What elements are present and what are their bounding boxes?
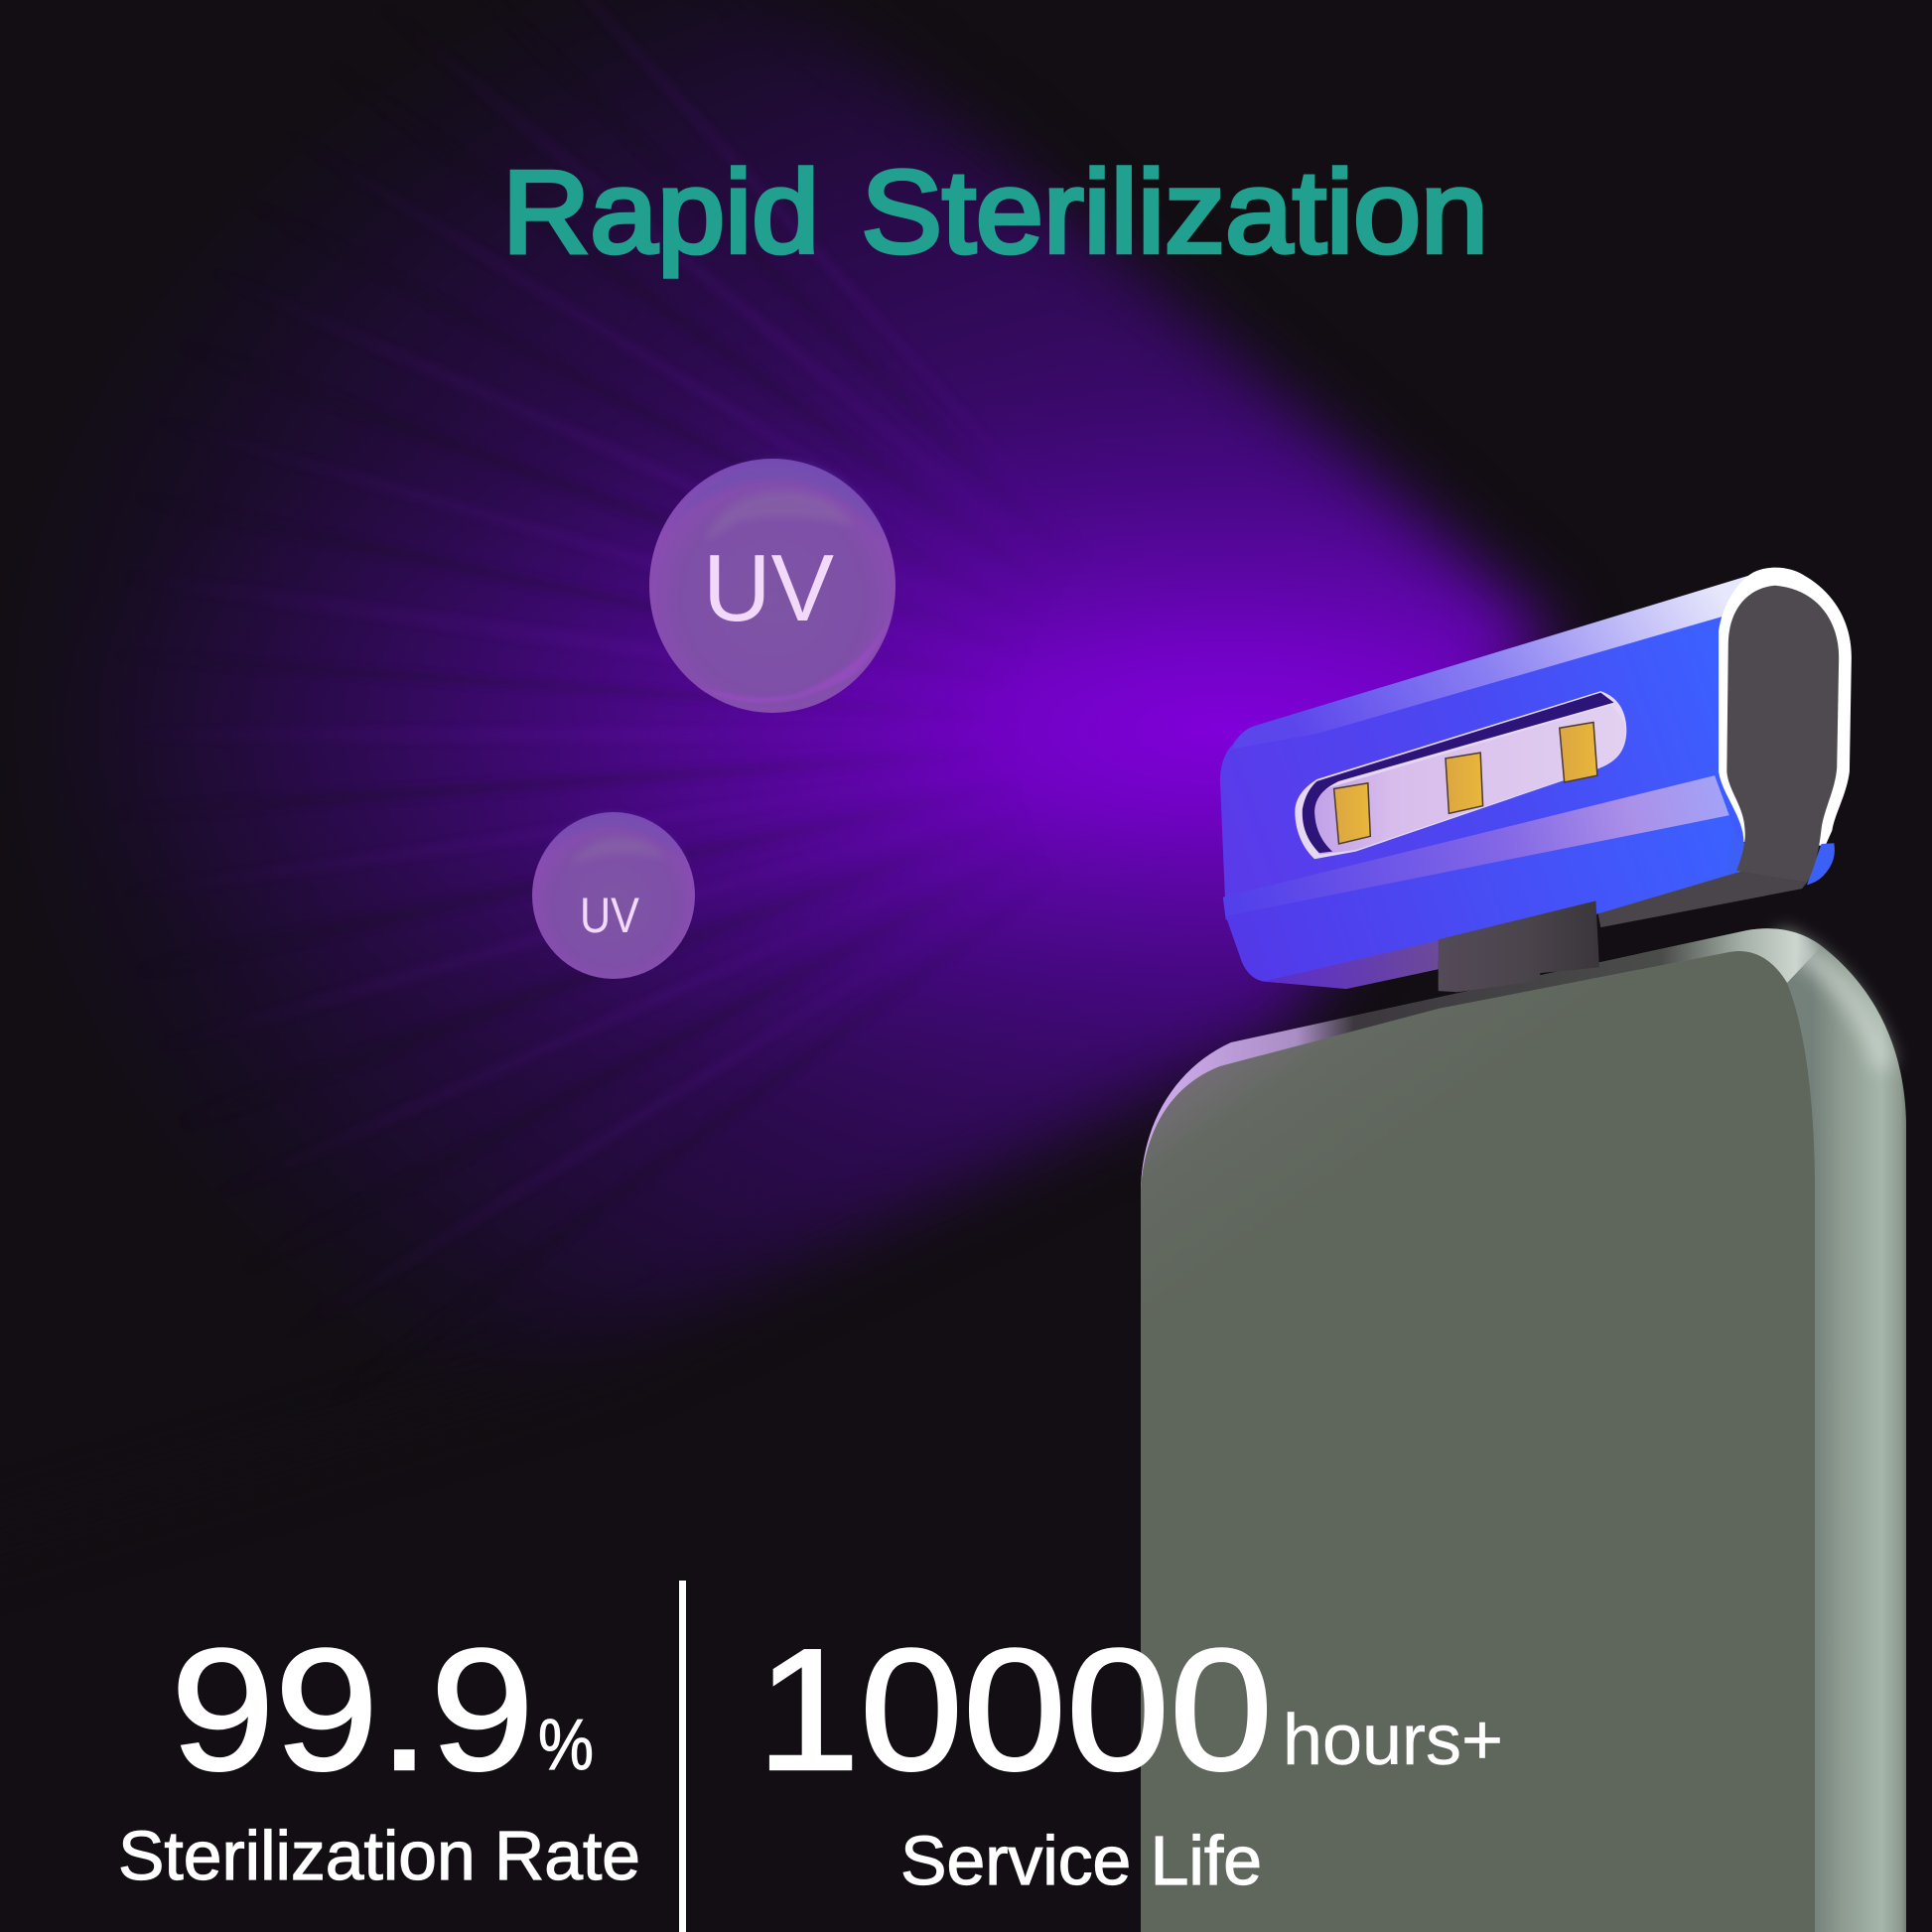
clip strap <box>1595 871 1807 927</box>
uv device <box>1220 568 1852 992</box>
phone screen <box>1141 951 1815 1932</box>
blue body <box>1220 578 1743 988</box>
phone <box>1141 928 1906 1932</box>
stat: sterilization rate <box>118 1612 640 1894</box>
lower highlight band <box>1223 775 1729 920</box>
bubble: large UV <box>649 459 896 713</box>
led chips <box>1334 783 1370 844</box>
bubble: large UV: UV <box>703 535 834 641</box>
end cap outline <box>1719 568 1852 846</box>
stat: sterilization rate: 99.9 <box>171 1612 534 1806</box>
stat: sterilization rate: Sterilization Rate <box>118 1817 640 1894</box>
stat: service life: 10000 <box>757 1612 1273 1806</box>
stat: service life: Service Life <box>900 1822 1262 1899</box>
stat: service life <box>757 1612 1503 1899</box>
phone frame highlight <box>1777 938 1884 1067</box>
uv light beam <box>48 0 1587 1356</box>
bottom purple face <box>1264 941 1439 989</box>
end cap blue base <box>1725 836 1835 885</box>
title: Rapid Sterilization <box>502 147 1488 278</box>
divider <box>679 1581 686 1932</box>
top highlight <box>1232 574 1753 749</box>
bubble: small UV: UV <box>580 888 640 943</box>
lower blue face <box>1226 815 1743 988</box>
phone frame <box>1141 928 1906 1932</box>
bubble: small UV <box>532 812 695 979</box>
stat: sterilization rate: % <box>538 1706 594 1785</box>
connector <box>1439 900 1599 992</box>
stat: service life: hours+ <box>1283 1701 1503 1780</box>
end cap opening <box>1726 586 1839 883</box>
phone top edge <box>1141 928 1822 1191</box>
led window <box>1295 691 1626 859</box>
